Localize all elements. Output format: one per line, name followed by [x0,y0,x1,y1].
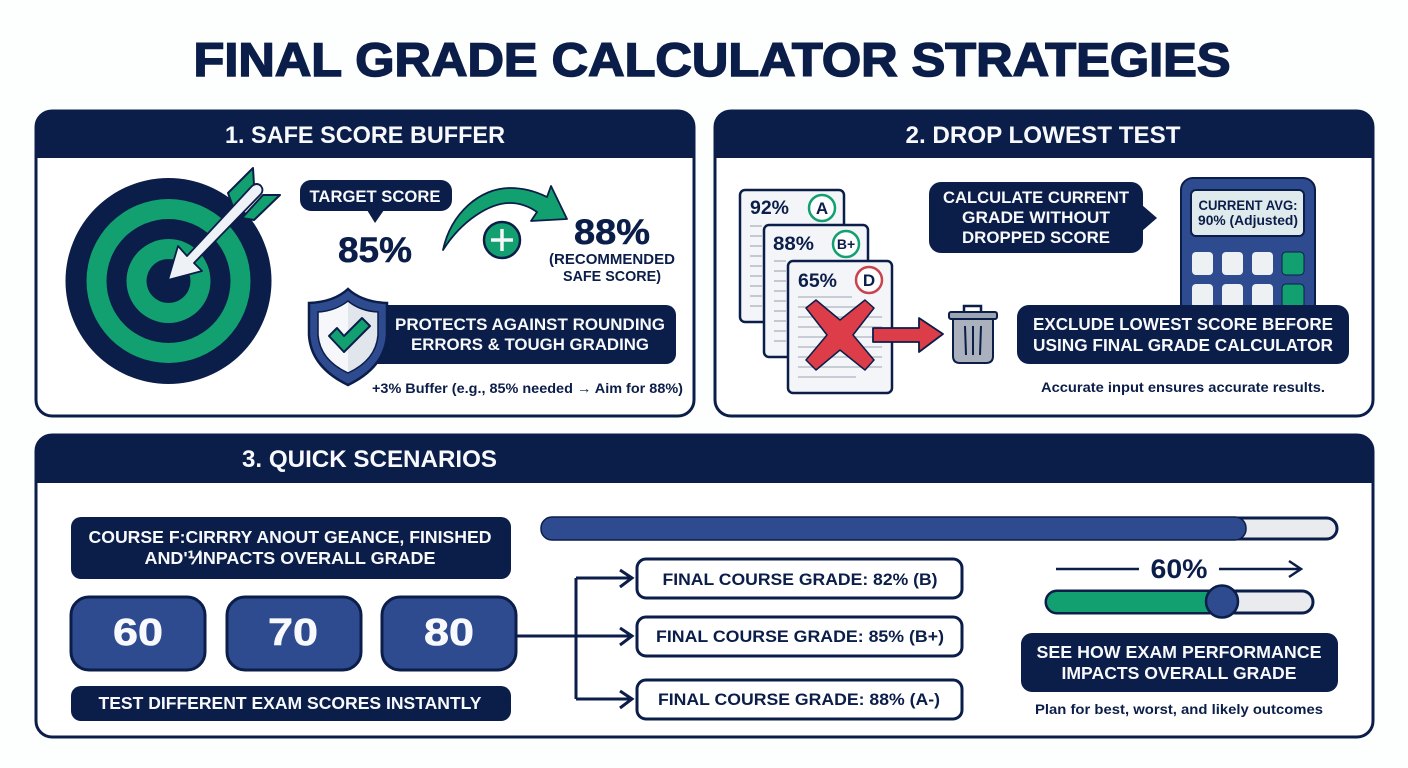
banner: protects against rounding: PROTECTS AGAINST ROUNDING [395,315,665,334]
result: 88% A-: FINAL COURSE GRADE: 88% (A-) [658,691,940,709]
arrow: curved green [443,186,567,250]
icon: calculator: CURRENT AVG: [1198,198,1298,213]
result: 82% B: FINAL COURSE GRADE: 82% (B) [662,571,938,589]
arrows: score to results [517,570,632,708]
heading: drop lowest test [714,110,1374,158]
caption: buffer: +3% Buffer (e.g., 85% needed → Aim for 88%) [372,380,683,396]
banner: course description [71,517,511,579]
panel: drop lowest test [714,110,1374,416]
banner: protects against rounding: ERRORS & TOUGH GRADING [411,335,649,354]
label: recommended safe score [549,251,675,285]
caption: accurate input: Accurate input ensures accurate results. [1041,379,1325,395]
banner: test different scores: TEST DIFFERENT EXAM SCORES INSTANTLY [98,693,482,713]
heading: drop lowest test: 2. DROP LOWEST TEST [906,122,1181,149]
icon: trash can [949,306,997,363]
callout: calculate current grade: DROPPED SCORE [962,228,1110,247]
banner: protects against rounding [360,305,676,364]
banner: see how exam performance: IMPACTS OVERALL GRADE [1062,663,1296,683]
paper: 88% B+: 88% [773,234,814,255]
icon: calculator: 90% (Adjusted) [1198,213,1298,228]
panel: quick scenarios [35,434,1374,737]
heading: quick scenarios [35,434,1374,483]
arrow: to trash [873,318,943,352]
callout: target score [300,180,452,223]
paper: 65% D [788,261,892,393]
label: 60% with arrow: 60% [1150,554,1208,584]
banner: exclude lowest score [1017,305,1349,364]
panel: safe score buffer [35,110,695,416]
icon: plus [484,222,520,258]
heading: safe score buffer [35,110,695,158]
paper: 65% D: D [863,271,875,290]
label: 60% with arrow [1056,554,1301,584]
banner: exclude lowest score: EXCLUDE LOWEST SCORE BEFORE [1033,314,1333,334]
score button: 60 [71,597,205,670]
banner: see how exam performance: SEE HOW EXAM PERFORMANCE [1036,642,1322,662]
label: recommended safe score: SAFE SCORE) [563,268,661,285]
paper: 92% A: A [816,199,828,218]
result: 85% B+: FINAL COURSE GRADE: 85% (B+) [656,628,944,646]
paper: 92% A: 92% [750,198,789,219]
banner: exclude lowest score: USING FINAL GRADE CALCULATOR [1033,335,1333,355]
banner: course description: AND'⅟INPACTS OVERALL GRADE [144,548,435,568]
icon: shield with check [309,289,387,385]
paper: 88% B+: B+ [837,236,855,252]
callout: calculate current grade: GRADE WITHOUT [962,208,1111,227]
banner: course description: COURSE F:CIRRRY ANOUT GEANCE, FINISHED [88,527,492,547]
icon: red X [806,300,874,370]
heading: safe score buffer: 1. SAFE SCORE BUFFER [225,122,505,149]
icon: target with arrow [66,168,280,384]
icon: calculator [1181,178,1315,320]
label: recommended safe score: (RECOMMENDED [549,251,675,268]
score button: 80: 80 [424,612,474,654]
score button: 80 [382,597,516,670]
slider [1046,586,1313,618]
score button: 70: 70 [268,612,318,654]
heading: quick scenarios: 3. QUICK SCENARIOS [242,446,497,473]
caption: plan for outcomes: Plan for best, worst, and likely outcomes [1035,701,1323,717]
number: 85%: 85% [338,231,412,270]
result: 85% B+ [637,617,962,656]
banner: see how exam performance [1021,633,1338,692]
paper: 88% B+ [764,225,868,357]
number: 88%: 88% [574,213,650,252]
result: 88% A- [637,680,962,719]
callout: calculate current grade [929,182,1157,253]
score button: 70 [227,597,361,670]
score button: 60: 60 [113,612,163,654]
callout: target score: TARGET SCORE [310,187,440,206]
progress bar [541,517,1337,540]
banner: test different scores [71,686,511,721]
result: 82% B [637,559,962,598]
title: FINAL GRADE CALCULATOR STRATEGIES [194,33,1230,86]
paper: 65% D: 65% [798,271,837,292]
callout: calculate current grade: CALCULATE CURRENT [943,188,1130,207]
paper: 92% A [740,190,844,322]
